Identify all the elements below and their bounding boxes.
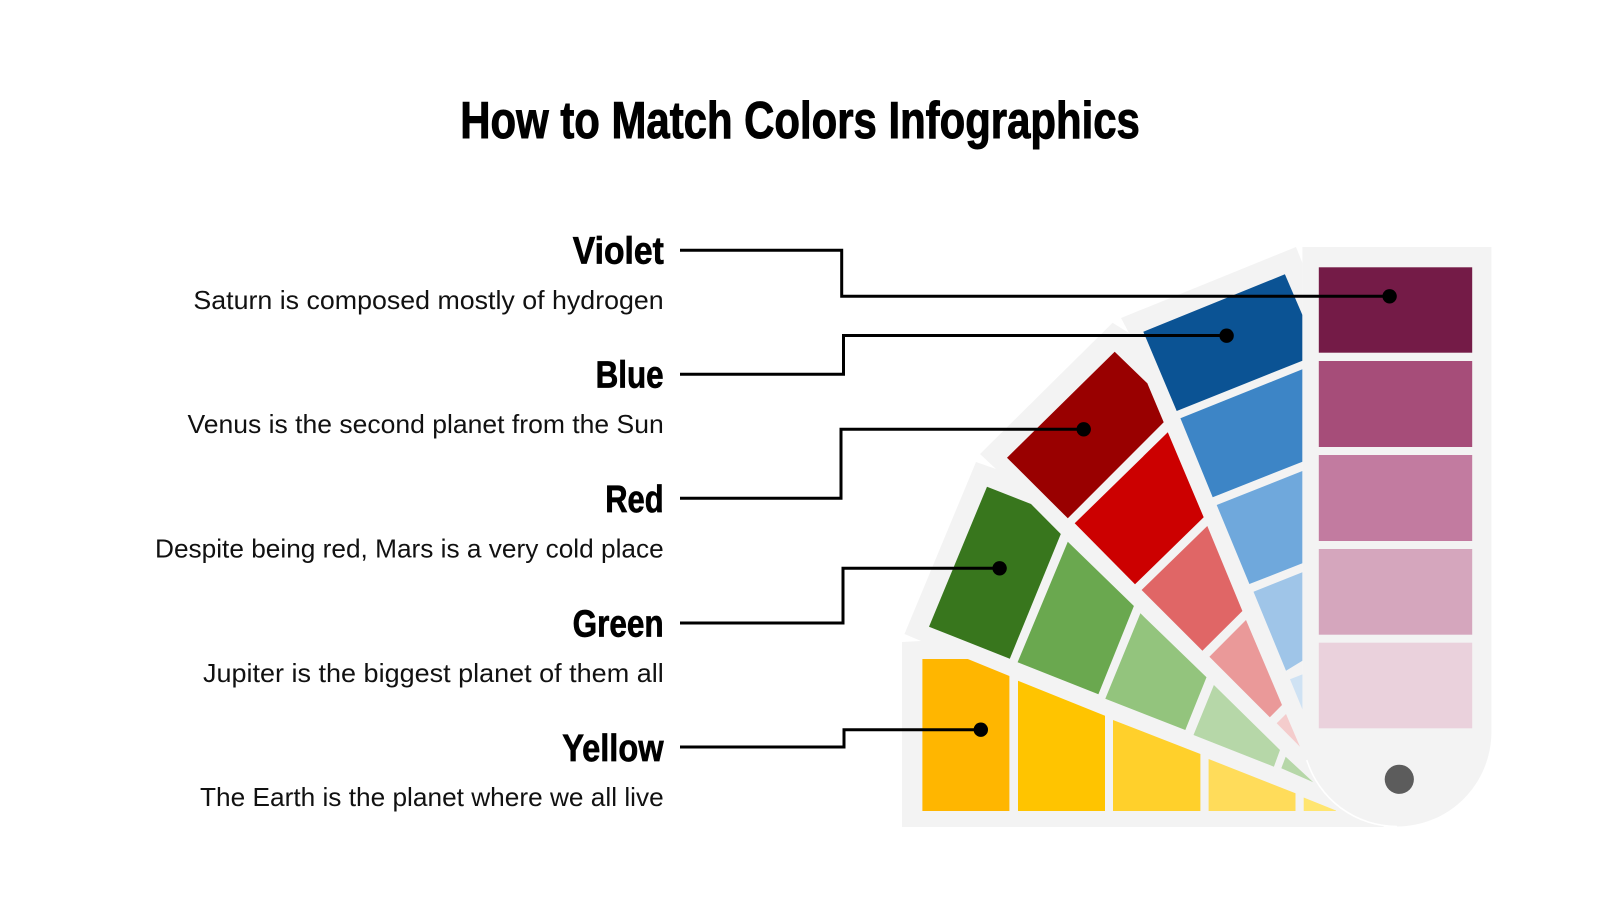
item: Green <box>203 604 664 688</box>
connector: Violet <box>680 250 1397 303</box>
fan backing <box>902 247 1384 827</box>
item: Green: Jupiter is the biggest planet of them all <box>203 658 664 688</box>
connector: Red <box>680 422 1091 498</box>
item: Blue <box>188 354 664 439</box>
item: Red: Red <box>605 479 664 521</box>
item: Green: Green <box>573 604 664 646</box>
item: Red <box>155 479 664 564</box>
item: Violet: Saturn is composed mostly of hydrogen <box>193 285 664 315</box>
item: Blue: Blue <box>596 354 664 396</box>
item: Violet <box>193 230 664 315</box>
green strip <box>929 487 1313 782</box>
title: How to Match Colors Infographics <box>460 92 1140 150</box>
blue strip <box>1143 274 1303 710</box>
yellow strip <box>922 659 1336 811</box>
connector: Green <box>680 561 1007 623</box>
violet strip with hub <box>1302 247 1491 826</box>
item: Blue: Venus is the second planet from the Sun <box>188 409 664 439</box>
item: Red: Despite being red, Mars is a very cold place <box>155 534 664 564</box>
color swatch fan <box>902 247 1491 827</box>
item: Yellow <box>200 728 664 812</box>
red strip <box>1007 352 1300 747</box>
connector: Yellow <box>680 722 988 747</box>
item: Yellow: The Earth is the planet where we all live <box>200 782 664 812</box>
item: Yellow: Yellow <box>562 728 664 770</box>
item: Violet: Violet <box>573 230 664 272</box>
connector: Blue <box>680 328 1234 374</box>
